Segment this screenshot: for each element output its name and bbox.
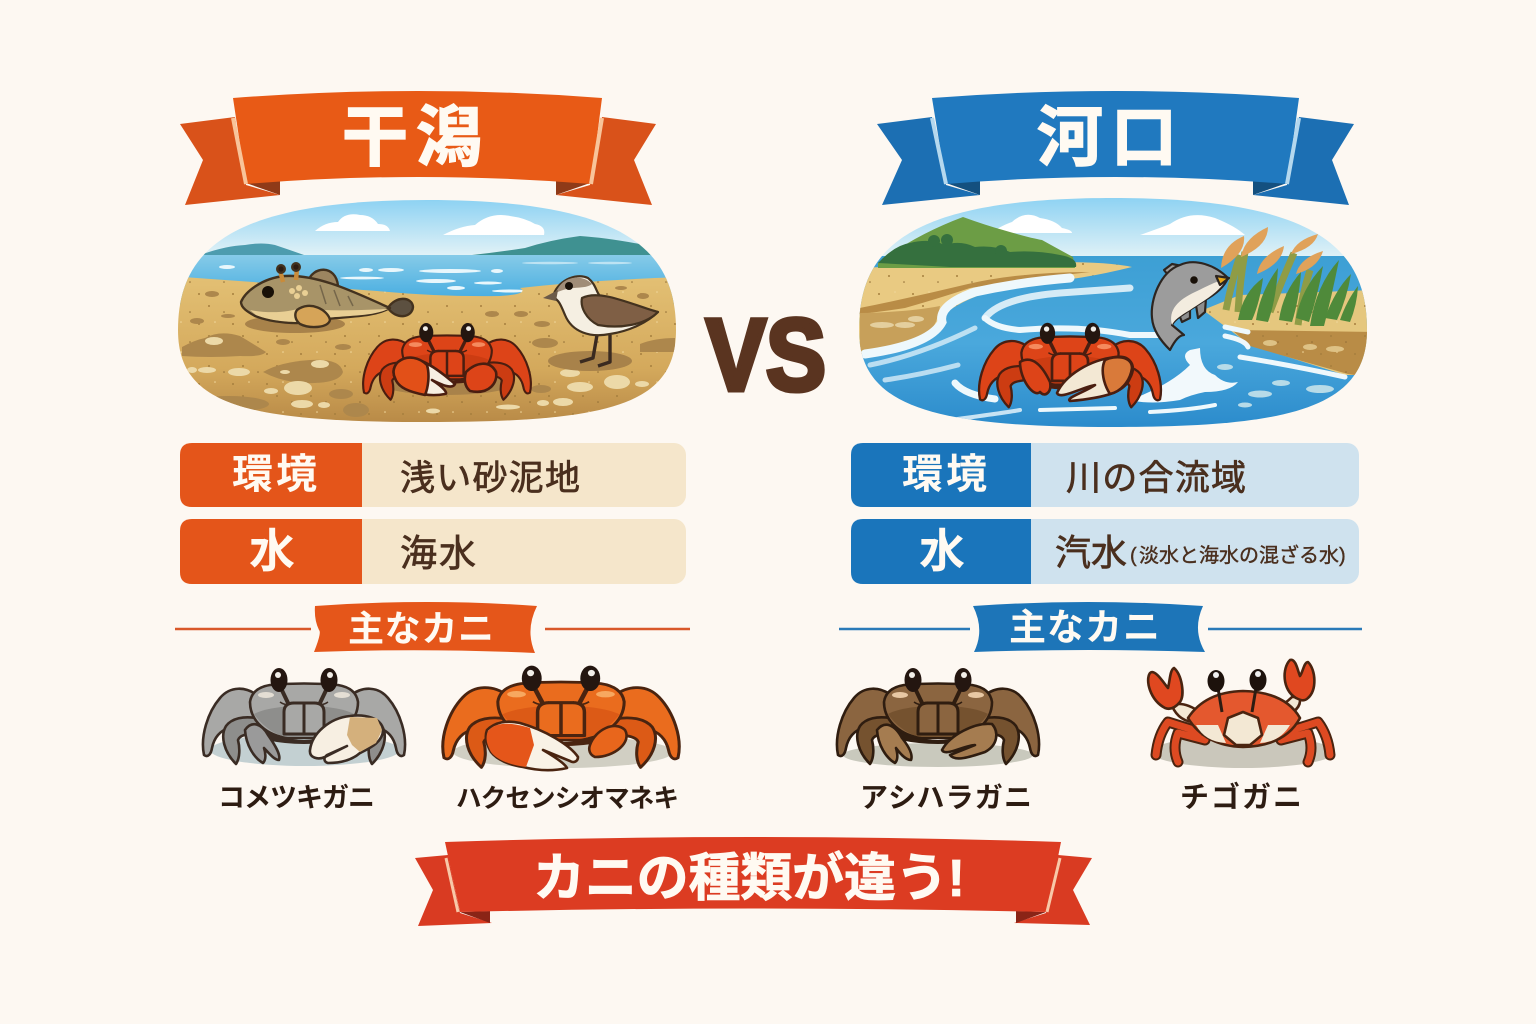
label: ハクセンシオマネキ: ハクセンシオマネキ	[456, 785, 679, 813]
icon: red crab in water	[979, 323, 1161, 407]
text: カニの種類が違う！: カニの種類が違う!	[533, 850, 965, 908]
label: コメツキガニ: コメツキガニ	[218, 783, 375, 813]
row: 水: 水	[249, 525, 295, 577]
row: 水: 淡水と海水の混ざる水	[1139, 543, 1339, 567]
crab: チゴガニ	[1148, 660, 1335, 768]
icon: mudskipper	[241, 263, 413, 333]
pebbles and mud mounds	[182, 286, 675, 417]
water currents	[865, 278, 1345, 420]
row: 水: (	[1130, 545, 1137, 567]
right bank	[1203, 290, 1375, 375]
reeds	[1221, 227, 1358, 326]
row: 水	[851, 519, 1359, 584]
crab: ハクセンシオマネキ	[443, 666, 679, 770]
clouds	[315, 214, 544, 235]
banner: カニの種類が違う！	[415, 837, 1092, 926]
icon: red crab	[363, 323, 531, 400]
row: 環境	[180, 443, 686, 507]
left bank	[850, 262, 1132, 355]
row: 環境: 浅い砂泥地	[400, 459, 580, 498]
illustration: estuary scene	[850, 192, 1375, 431]
forested hill	[878, 217, 1076, 268]
icon: sandpiper	[543, 276, 658, 371]
sand	[170, 276, 685, 430]
label: アシハラガニ: アシハラガニ	[860, 782, 1032, 813]
row: 水: 汽水	[1055, 532, 1127, 573]
heading: 干潟: 干潟	[342, 100, 482, 174]
row: 水: )	[1339, 545, 1346, 567]
row: 環境: 川の合流域	[1066, 459, 1246, 498]
illustration: tidal flat scene	[170, 195, 685, 430]
subheading: 主なカニ estuary	[839, 602, 1362, 652]
row: 水	[180, 519, 686, 584]
panel: tidal flat facts	[180, 443, 686, 584]
subheading: 主なカニ tidal flat: 主なカニ	[348, 608, 494, 649]
panel: estuary facts	[851, 443, 1359, 584]
row: 水: 水	[919, 525, 965, 577]
row: 環境: 環境	[232, 451, 317, 497]
islands	[200, 236, 660, 256]
heading: 河口: 河口	[1037, 100, 1177, 174]
VS label: VS	[706, 298, 826, 412]
river water	[850, 256, 1375, 431]
crab: アシハラガニ	[837, 668, 1039, 767]
subheading: 主なカニ tidal flat	[175, 602, 690, 653]
label: チゴガニ: チゴガニ	[1180, 780, 1302, 814]
crab: コメツキガニ	[203, 668, 405, 766]
icon: leaping fish	[1152, 262, 1229, 350]
sea	[170, 255, 685, 305]
clouds	[990, 215, 1245, 235]
row: 環境	[851, 443, 1359, 507]
row: 環境: 環境	[902, 451, 987, 497]
banner: 河口	[877, 91, 1354, 205]
splash	[1130, 348, 1238, 402]
banner: 干潟	[180, 91, 656, 205]
row: 水: 海水	[400, 533, 476, 574]
subheading: 主なカニ estuary: 主なカニ	[1009, 607, 1160, 648]
